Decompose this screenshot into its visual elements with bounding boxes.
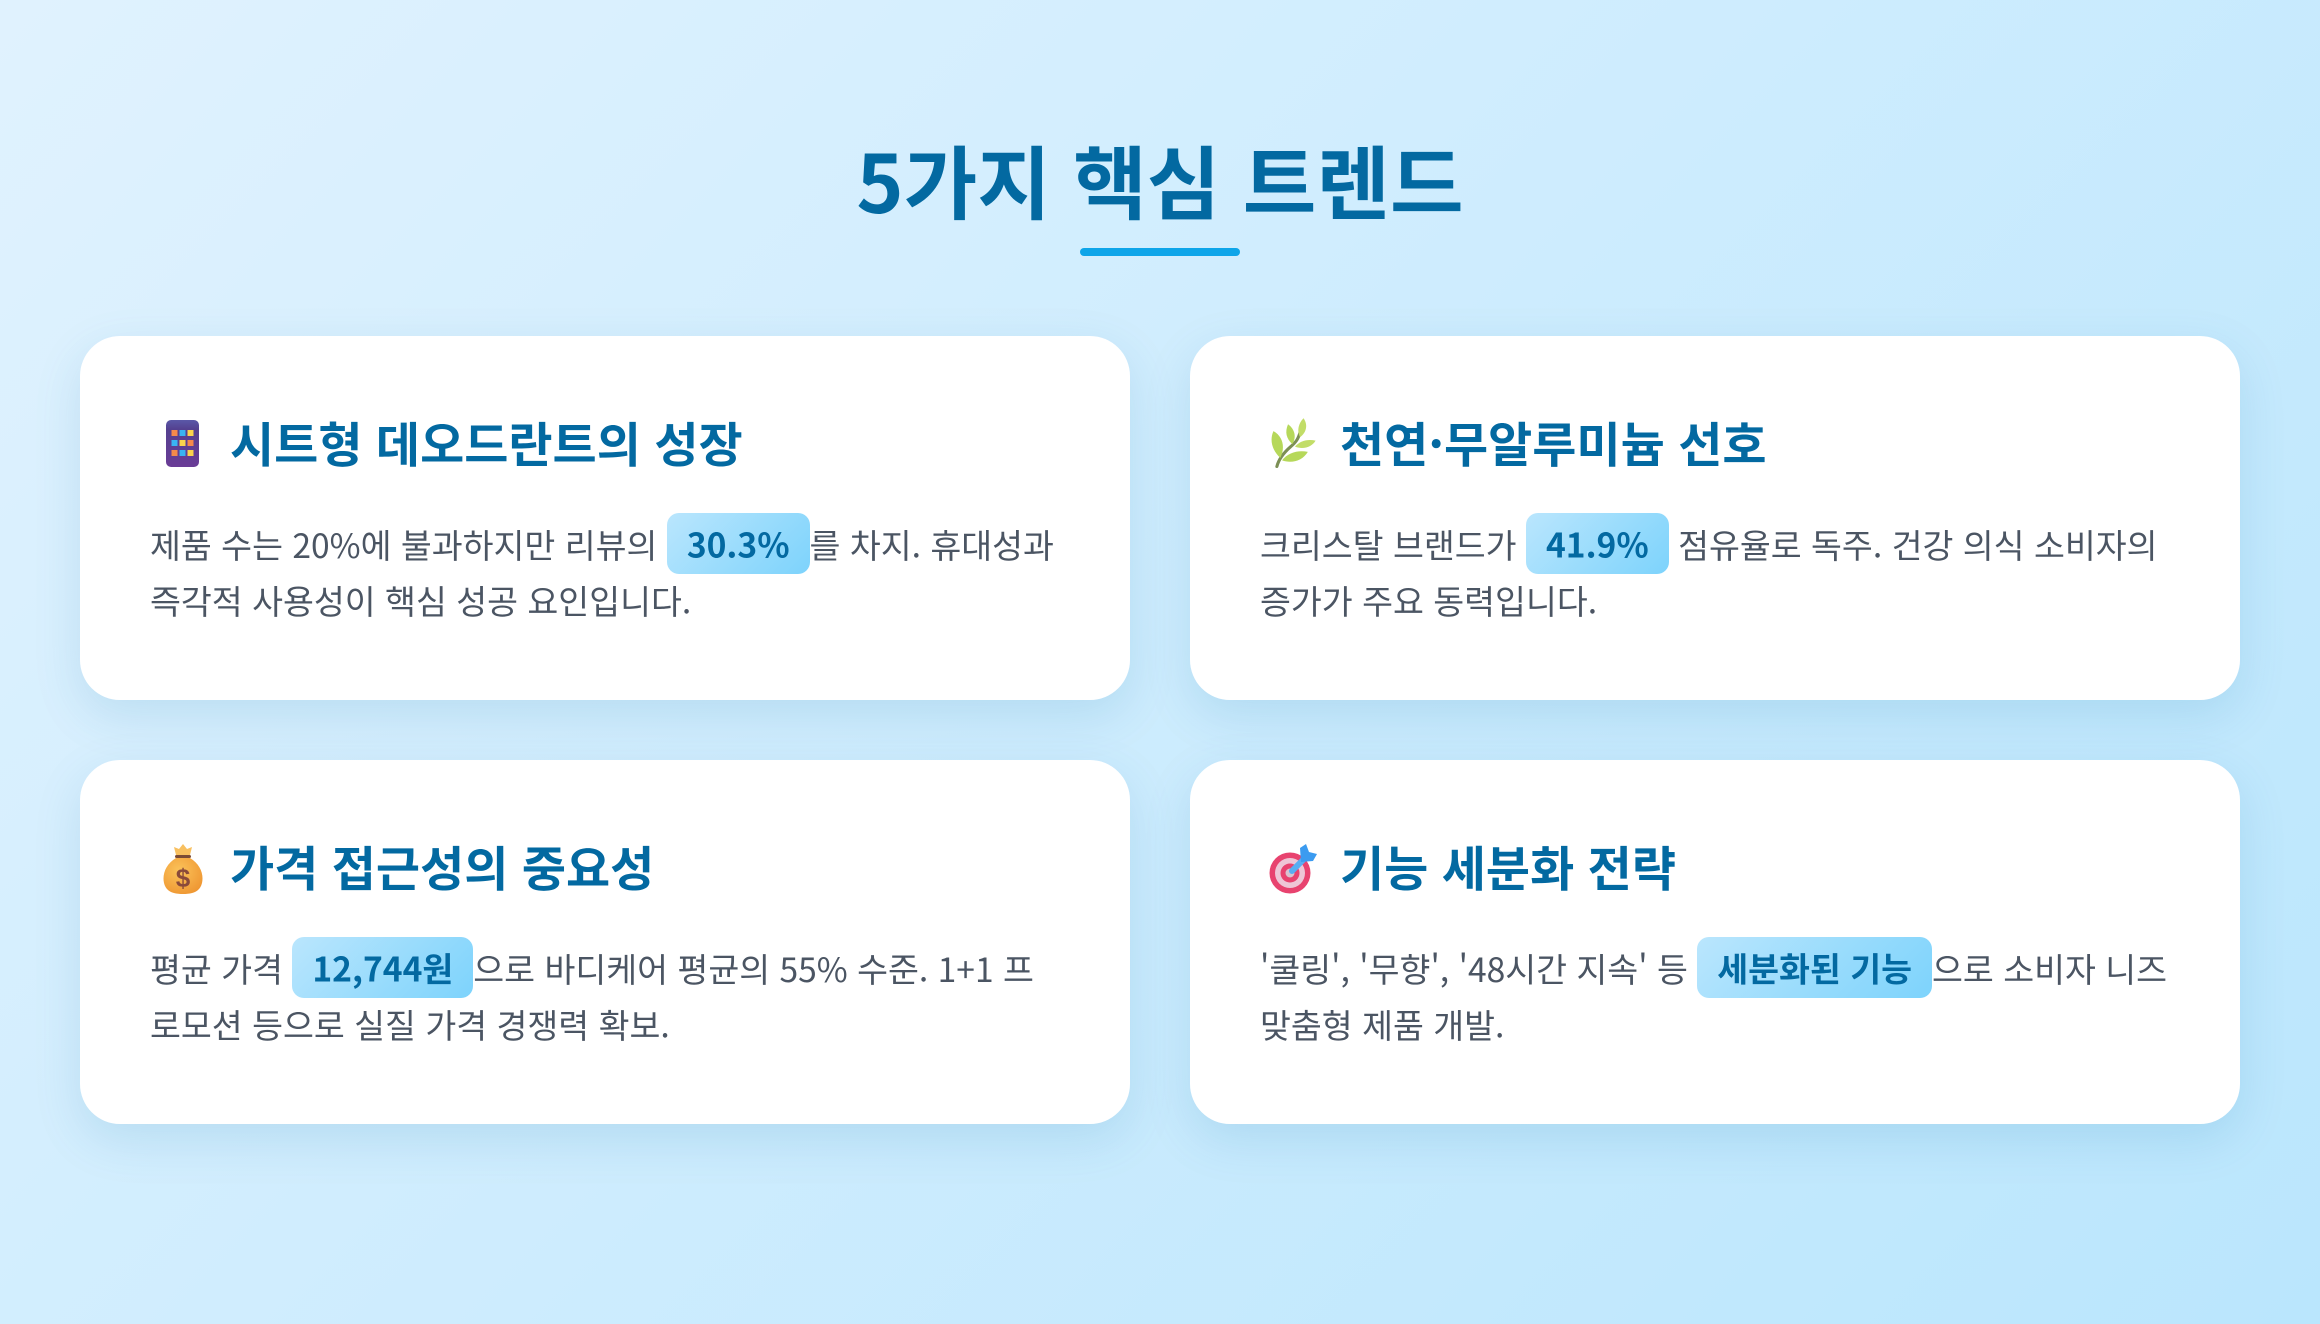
body text: price accessibility: 평균 가격 12,744원 으로 바디케어 평균의 55% 수준. 1+1 프 [150,943,1034,992]
icon: mobile phone [166,420,199,467]
body text: price accessibility [150,937,1034,1048]
heading: sheet deodorant growth: 시트형 데오드란트의 성장 [230,406,743,476]
body text: natural aluminum-free preference: 증가가 주요 동력입니다. [1260,575,1597,624]
title: 5가지 핵심 트렌드 [856,120,1464,236]
title underline [1080,248,1240,256]
icon: herb [1272,418,1316,468]
icon: bullseye with dart [1270,844,1317,894]
body text: sheet deodorant growth: 제품 수는 20%에 불과하지만 리뷰의 30.3% 를 차지. 휴대성과 [150,519,1054,568]
body text: price accessibility: 로모션 등으로 실질 가격 경쟁력 확보. [150,999,670,1048]
heading: natural aluminum-free preference: 천연·무알루미늄 선호 [1340,406,1767,476]
body text: feature segmentation strategy: 맞춤형 제품 개발. [1260,999,1504,1048]
body text: feature segmentation strategy [1260,937,2167,1048]
icon: money bag: $ [176,863,191,893]
body text: feature segmentation strategy: '쿨링', '무향', '48시간 지속' 등 세분화된 기능 으로 소비자 니즈 [1260,943,2167,992]
panel: price accessibility [80,760,1130,1124]
heading: feature segmentation strategy: 기능 세분화 전략 [1340,830,1676,900]
panel: sheet deodorant growth [80,336,1130,700]
body text: sheet deodorant growth: 즉각적 사용성이 핵심 성공 요인입니다. [150,575,691,624]
panel: natural aluminum-free preference [1190,336,2240,700]
body text: natural aluminum-free preference: 크리스탈 브랜드가 41.9% 점유율로 독주. 건강 의식 소비자의 [1260,519,2158,568]
heading: price accessibility: 가격 접근성의 중요성 [230,830,654,900]
panel: feature segmentation strategy [1190,760,2240,1124]
icon: money bag [164,844,202,894]
body text: sheet deodorant growth [150,513,1054,624]
body text: natural aluminum-free preference [1260,513,2158,624]
